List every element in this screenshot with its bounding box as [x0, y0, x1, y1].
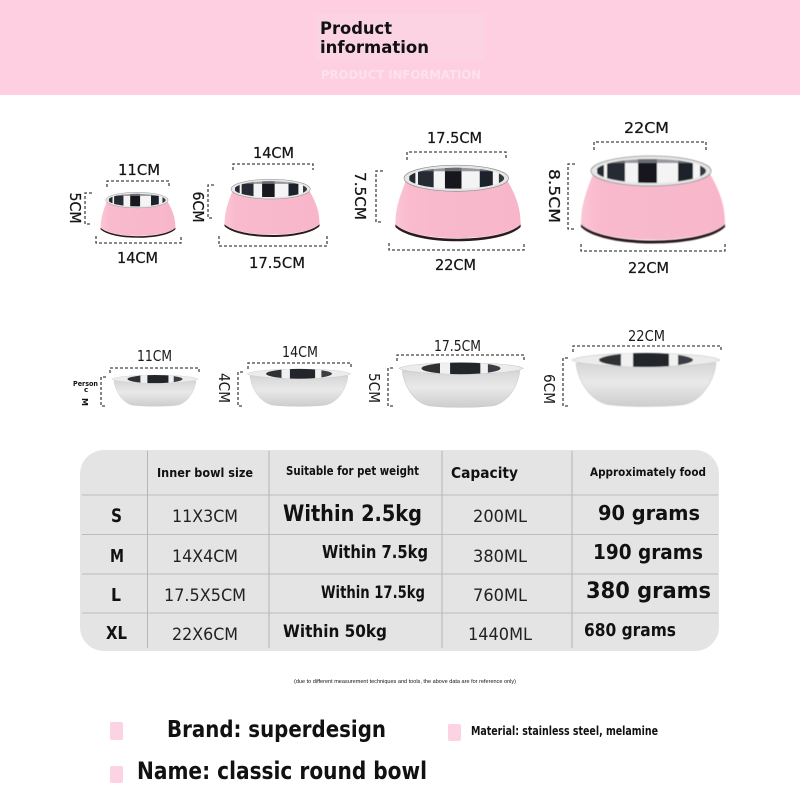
pink bowl XL with dimensions: 22CM	[624, 119, 669, 137]
row L: 380 grams	[586, 578, 711, 604]
row XL: 1440ML	[468, 625, 532, 645]
row M: Within 7.5kg	[322, 543, 428, 563]
row M: 380ML	[473, 547, 527, 567]
steel bowl XL with dimensions: 6CM	[540, 374, 558, 404]
heading: product information	[320, 19, 429, 58]
steel bowl S with dimensions: 11CM	[137, 347, 172, 365]
row L: L	[111, 585, 121, 606]
steel bowl XL with dimensions: 22CM	[628, 327, 665, 345]
steel bowl L with dimensions: 5CM	[365, 373, 383, 403]
row XL	[106, 621, 676, 645]
steel bowl XL with dimensions	[540, 327, 721, 406]
steel bowl L with dimensions	[365, 337, 524, 407]
pink bowl S with dimensions: 14CM	[117, 249, 158, 267]
row S: 200ML	[473, 507, 527, 527]
table header row	[157, 464, 706, 482]
steel bowl S with dimensions: c	[84, 386, 88, 394]
table header row: Capacity	[451, 464, 518, 482]
row L	[111, 578, 711, 606]
row S: 11X3CM	[172, 507, 238, 527]
table header row: Inner bowl size	[157, 465, 253, 480]
spec: material	[448, 724, 658, 741]
spec: brand: Brand: superdesign	[167, 717, 386, 743]
pink bowl XL with dimensions: 22CM	[628, 259, 669, 277]
row XL: 22X6CM	[172, 625, 238, 645]
spec: material: Material: stainless steel, melamine	[471, 724, 658, 738]
disclaimer note: (due to different measurement techniques and tools, the above data are for reference only)	[294, 679, 516, 685]
row S: S	[111, 505, 122, 527]
pink bowl M with dimensions: 14CM	[253, 144, 294, 162]
row L: Within 17.5kg	[321, 583, 425, 602]
table header row: Approximately food	[590, 465, 706, 479]
spec: name: Name: classic round bowl	[137, 757, 427, 785]
row M: 190 grams	[593, 540, 703, 564]
row M: M	[110, 546, 124, 567]
header banner	[0, 0, 800, 95]
pink bowl L with dimensions: 17.5CM	[427, 129, 482, 147]
steel bowl M with dimensions: 4CM	[215, 373, 233, 403]
row M	[110, 540, 703, 567]
row XL: 680 grams	[584, 621, 676, 641]
pink bowl S with dimensions: 5CM	[66, 192, 84, 224]
row S: Within 2.5kg	[283, 502, 422, 527]
heading: product information: information	[320, 38, 429, 58]
pink bowl L with dimensions: 7.5CM	[351, 172, 369, 220]
pink bowl M with dimensions: 17.5CM	[249, 254, 305, 272]
steel bowl S with dimensions: Person	[73, 380, 98, 388]
steel bowl S with dimensions: M	[80, 398, 89, 406]
table header row: Suitable for pet weight	[286, 464, 419, 478]
pink bowl XL with dimensions	[545, 119, 725, 277]
row XL: Within 50kg	[283, 622, 387, 642]
steel bowl L with dimensions: 17.5CM	[434, 337, 481, 355]
pink bowl S with dimensions: 11CM	[118, 161, 160, 179]
pink bowl XL with dimensions: 8.5CM	[545, 169, 563, 223]
subtitle: product information caps: PRODUCT INFORMATION	[321, 68, 481, 82]
pink bowl L with dimensions: 22CM	[435, 256, 476, 274]
row S	[111, 501, 700, 527]
size table	[80, 450, 719, 651]
heading: product information: Product	[320, 19, 392, 39]
row XL: XL	[106, 623, 127, 644]
pink bowl M with dimensions: 6CM	[189, 192, 207, 222]
row L: 760ML	[473, 586, 527, 606]
pink bowl L with dimensions	[351, 129, 524, 274]
steel bowl S with dimensions	[73, 347, 199, 406]
row S: 90 grams	[598, 501, 700, 525]
steel bowl M with dimensions: 14CM	[282, 343, 318, 361]
row L: 17.5X5CM	[164, 586, 246, 606]
pink bowl S with dimensions	[66, 161, 181, 267]
row M: 14X4CM	[172, 547, 238, 567]
steel bowl M with dimensions	[215, 343, 351, 406]
pink bowl M with dimensions	[189, 144, 327, 272]
